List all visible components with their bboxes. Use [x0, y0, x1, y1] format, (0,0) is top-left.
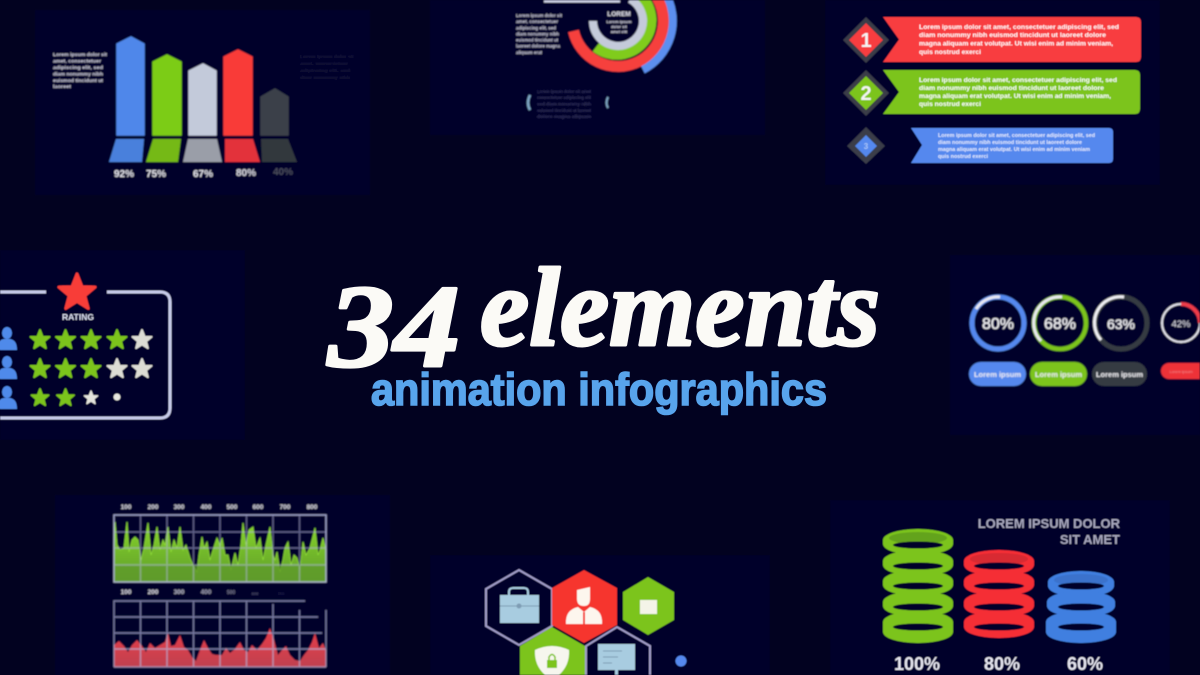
description text: laoreet: [53, 84, 71, 90]
badge 1: [843, 17, 889, 63]
ring 42%: 42%: [1171, 319, 1191, 330]
hexagon green: padlock: [520, 627, 585, 675]
description text: diam nonummy nibh: [516, 32, 559, 36]
banner 1: Lorem ipsum dolor sit amet, consectetuer adipiscing elit, sed: [919, 24, 1119, 31]
badge 3: [847, 127, 885, 164]
title: [327, 246, 880, 392]
green chart axis labels: 100: [121, 504, 132, 511]
badge 2: [843, 70, 889, 116]
red chart axis labels: 300: [174, 589, 185, 596]
center label: [606, 11, 632, 34]
banner 2: Lorem ipsum dolor sit amet, consectetuer adipiscing elit, sed: [919, 77, 1117, 84]
description text: [516, 13, 562, 55]
red cylinder: [964, 550, 1034, 638]
red chart axis labels: 200: [148, 589, 159, 596]
ring 80%: 80%: [982, 316, 1014, 333]
badge 1: 1: [860, 30, 872, 52]
faded quote text: consectetuer adipiscing elit: [537, 95, 592, 100]
banner 1: [883, 17, 1141, 62]
cylinder heading: LOREM IPSUM DOLOR: [978, 516, 1121, 531]
description text: diam nonummy nibh: [53, 72, 103, 78]
subtitle: animation infographics: [371, 364, 827, 415]
faded quote brackets: [528, 95, 608, 110]
pill green: [1030, 362, 1087, 386]
banner 1: quis nostrud exerci: [919, 49, 981, 56]
ring 68%: 68%: [1044, 316, 1076, 333]
rating label: RATING: [62, 312, 94, 322]
description text: aliquam erat: [516, 50, 542, 55]
banner 3: [911, 128, 1113, 163]
panel: numbered banners: [825, 0, 1160, 185]
star row 3: [31, 389, 121, 405]
description text: euismod tincidunt ut: [516, 38, 558, 42]
center label: amet elit: [611, 29, 628, 34]
description text: laoreet dolore magna: [516, 44, 560, 48]
faded description text: Lorem ipsum dolor sit: [300, 54, 354, 60]
banner 2: diam nonummy nibh euismod tincidunt ut laoreet dolore: [919, 85, 1105, 92]
green chart grid: [114, 515, 326, 582]
badge 3: 3: [864, 142, 869, 151]
hexagon outline: briefcase: [486, 570, 552, 645]
red chart axis labels: 500: [227, 590, 235, 596]
bars: [117, 37, 288, 135]
pill green: Lorem ipsum: [1035, 370, 1082, 379]
star row 1: [30, 330, 152, 348]
green chart axis labels: 500: [227, 504, 238, 511]
hexagon red: person: [552, 570, 617, 643]
green chart axis labels: 600: [253, 504, 264, 511]
cylinder percentages: 100%: [894, 654, 940, 674]
blue dot: [676, 656, 686, 666]
faded quote text: Lorem ipsum dolor sit amet: [537, 89, 592, 94]
green chart axis labels: 200: [148, 504, 159, 511]
rating frame: [0, 292, 170, 418]
cylinder percentages: [894, 654, 1103, 674]
red chart axis labels: 600: [252, 591, 259, 596]
banner 3: diam nonummy nibh euismod tincidunt ut laoreet dolore: [938, 140, 1082, 146]
top bar: [544, 0, 620, 2]
center label: Lorem ipsum: [606, 19, 632, 24]
faded description text: amet, consectetuer: [300, 61, 348, 67]
description text: euismod tincidunt ut: [53, 78, 103, 84]
faded quote text: euismod tincidunt ut laoreet: [537, 108, 591, 113]
hexagon green: small square: [623, 577, 674, 635]
green chart axis labels: 300: [174, 504, 185, 511]
description text: amet, consectetuer: [53, 58, 101, 64]
green chart axis labels: [121, 504, 318, 511]
banner 3: magna aliquam erat volutpat. Ut wisi enim ad minim veniam: [938, 147, 1091, 153]
description text: adipiscing elit, sed: [53, 65, 103, 71]
user icons: [0, 327, 17, 409]
title: 34: [327, 261, 460, 392]
green chart axis labels: 400: [201, 504, 212, 511]
banner 2: magna aliquam erat volutpat. Ut wisi enim ad minim veniam,: [919, 93, 1111, 100]
pill blue: Lorem ipsum: [974, 370, 1021, 379]
bar percentages: 75%: [146, 169, 166, 180]
red area chart: [114, 628, 326, 667]
red chart axis labels: 700: [278, 591, 285, 596]
banner 3: Lorem ipsum dolor sit amet, consectetuer adipiscing elit, sed: [938, 133, 1095, 139]
pill blue: [969, 362, 1026, 386]
banner 2: quis nostrud exerci: [919, 101, 981, 108]
description text: adipiscing elit, sed: [516, 26, 556, 30]
icon: red star: [59, 274, 95, 308]
description text: Lorem ipsum dolor sit: [516, 13, 562, 18]
red chart axis labels: 400: [201, 589, 212, 596]
cylinder percentages: 60%: [1067, 654, 1103, 674]
banner 2: [883, 70, 1140, 114]
panel: progress rings: [950, 255, 1200, 435]
description text: [53, 52, 107, 90]
banner 1: magna aliquam erat volutpat. Ut wisi enim ad minim veniam,: [919, 40, 1113, 48]
red chart grid: [114, 601, 326, 667]
pill dark: [1092, 362, 1147, 386]
faded description text: diam nonummy nibh: [300, 75, 350, 81]
bar percentages: 92%: [114, 169, 134, 180]
blue cylinder: [1046, 571, 1116, 643]
concentric arcs: [574, 0, 671, 68]
cylinder heading: [978, 516, 1121, 547]
faded quote text: [537, 89, 592, 119]
banner 3: quis nostrud exerci: [938, 154, 989, 160]
faded description text: [300, 54, 354, 81]
pill red: Lorem ipsum: [1169, 369, 1193, 374]
faded description text: adipiscing elit, sed: [300, 68, 350, 74]
star row 2: [30, 359, 152, 377]
cylinder heading: SIT AMET: [1060, 532, 1120, 547]
red chart axis labels: 100: [121, 589, 132, 596]
green cylinder: [883, 529, 953, 643]
cylinder percentages: 80%: [984, 654, 1020, 674]
green area chart: [114, 522, 326, 582]
bar percentages: 40%: [273, 167, 293, 178]
panel: bar chart: [35, 10, 370, 195]
bar percentages: [114, 167, 293, 180]
ring 63%: [1094, 297, 1147, 349]
center label: LOREM: [607, 11, 631, 18]
center label: dolor sit: [611, 24, 628, 29]
red chart axis labels: [121, 589, 285, 596]
banner 1: diam nonummy nibh euismod tincidunt ut laoreet dolore: [919, 32, 1107, 39]
title: elements: [480, 246, 880, 370]
panel: radial chart: [430, 0, 765, 135]
ring 68%: [1034, 297, 1086, 349]
bar percentages: 80%: [236, 168, 256, 179]
green chart axis labels: 800: [307, 504, 318, 511]
description text: amet, consectetuer: [516, 19, 558, 24]
panel: rating: [0, 250, 245, 440]
pill dark: Lorem ipsum: [1096, 370, 1143, 379]
description text: Lorem ipsum dolor sit: [53, 52, 107, 58]
pill red: [1161, 363, 1200, 379]
badge 2: 2: [860, 83, 872, 105]
hexagon outline: presentation board: [586, 627, 650, 675]
bar percentages: 67%: [193, 169, 213, 180]
bar reflections: [109, 139, 297, 162]
ring 63%: 63%: [1107, 316, 1135, 332]
ring 42%: [1162, 304, 1200, 342]
ring 80%: [972, 297, 1024, 349]
faded quote text: dolore magna aliquam: [537, 114, 591, 119]
green chart axis labels: 700: [280, 504, 291, 511]
faded quote text: sed diam nonummy nibh: [537, 102, 591, 106]
panel: hexagon icons: [430, 555, 770, 675]
panel: area charts: [55, 495, 390, 675]
panel: cylinder stacks: [830, 500, 1170, 675]
